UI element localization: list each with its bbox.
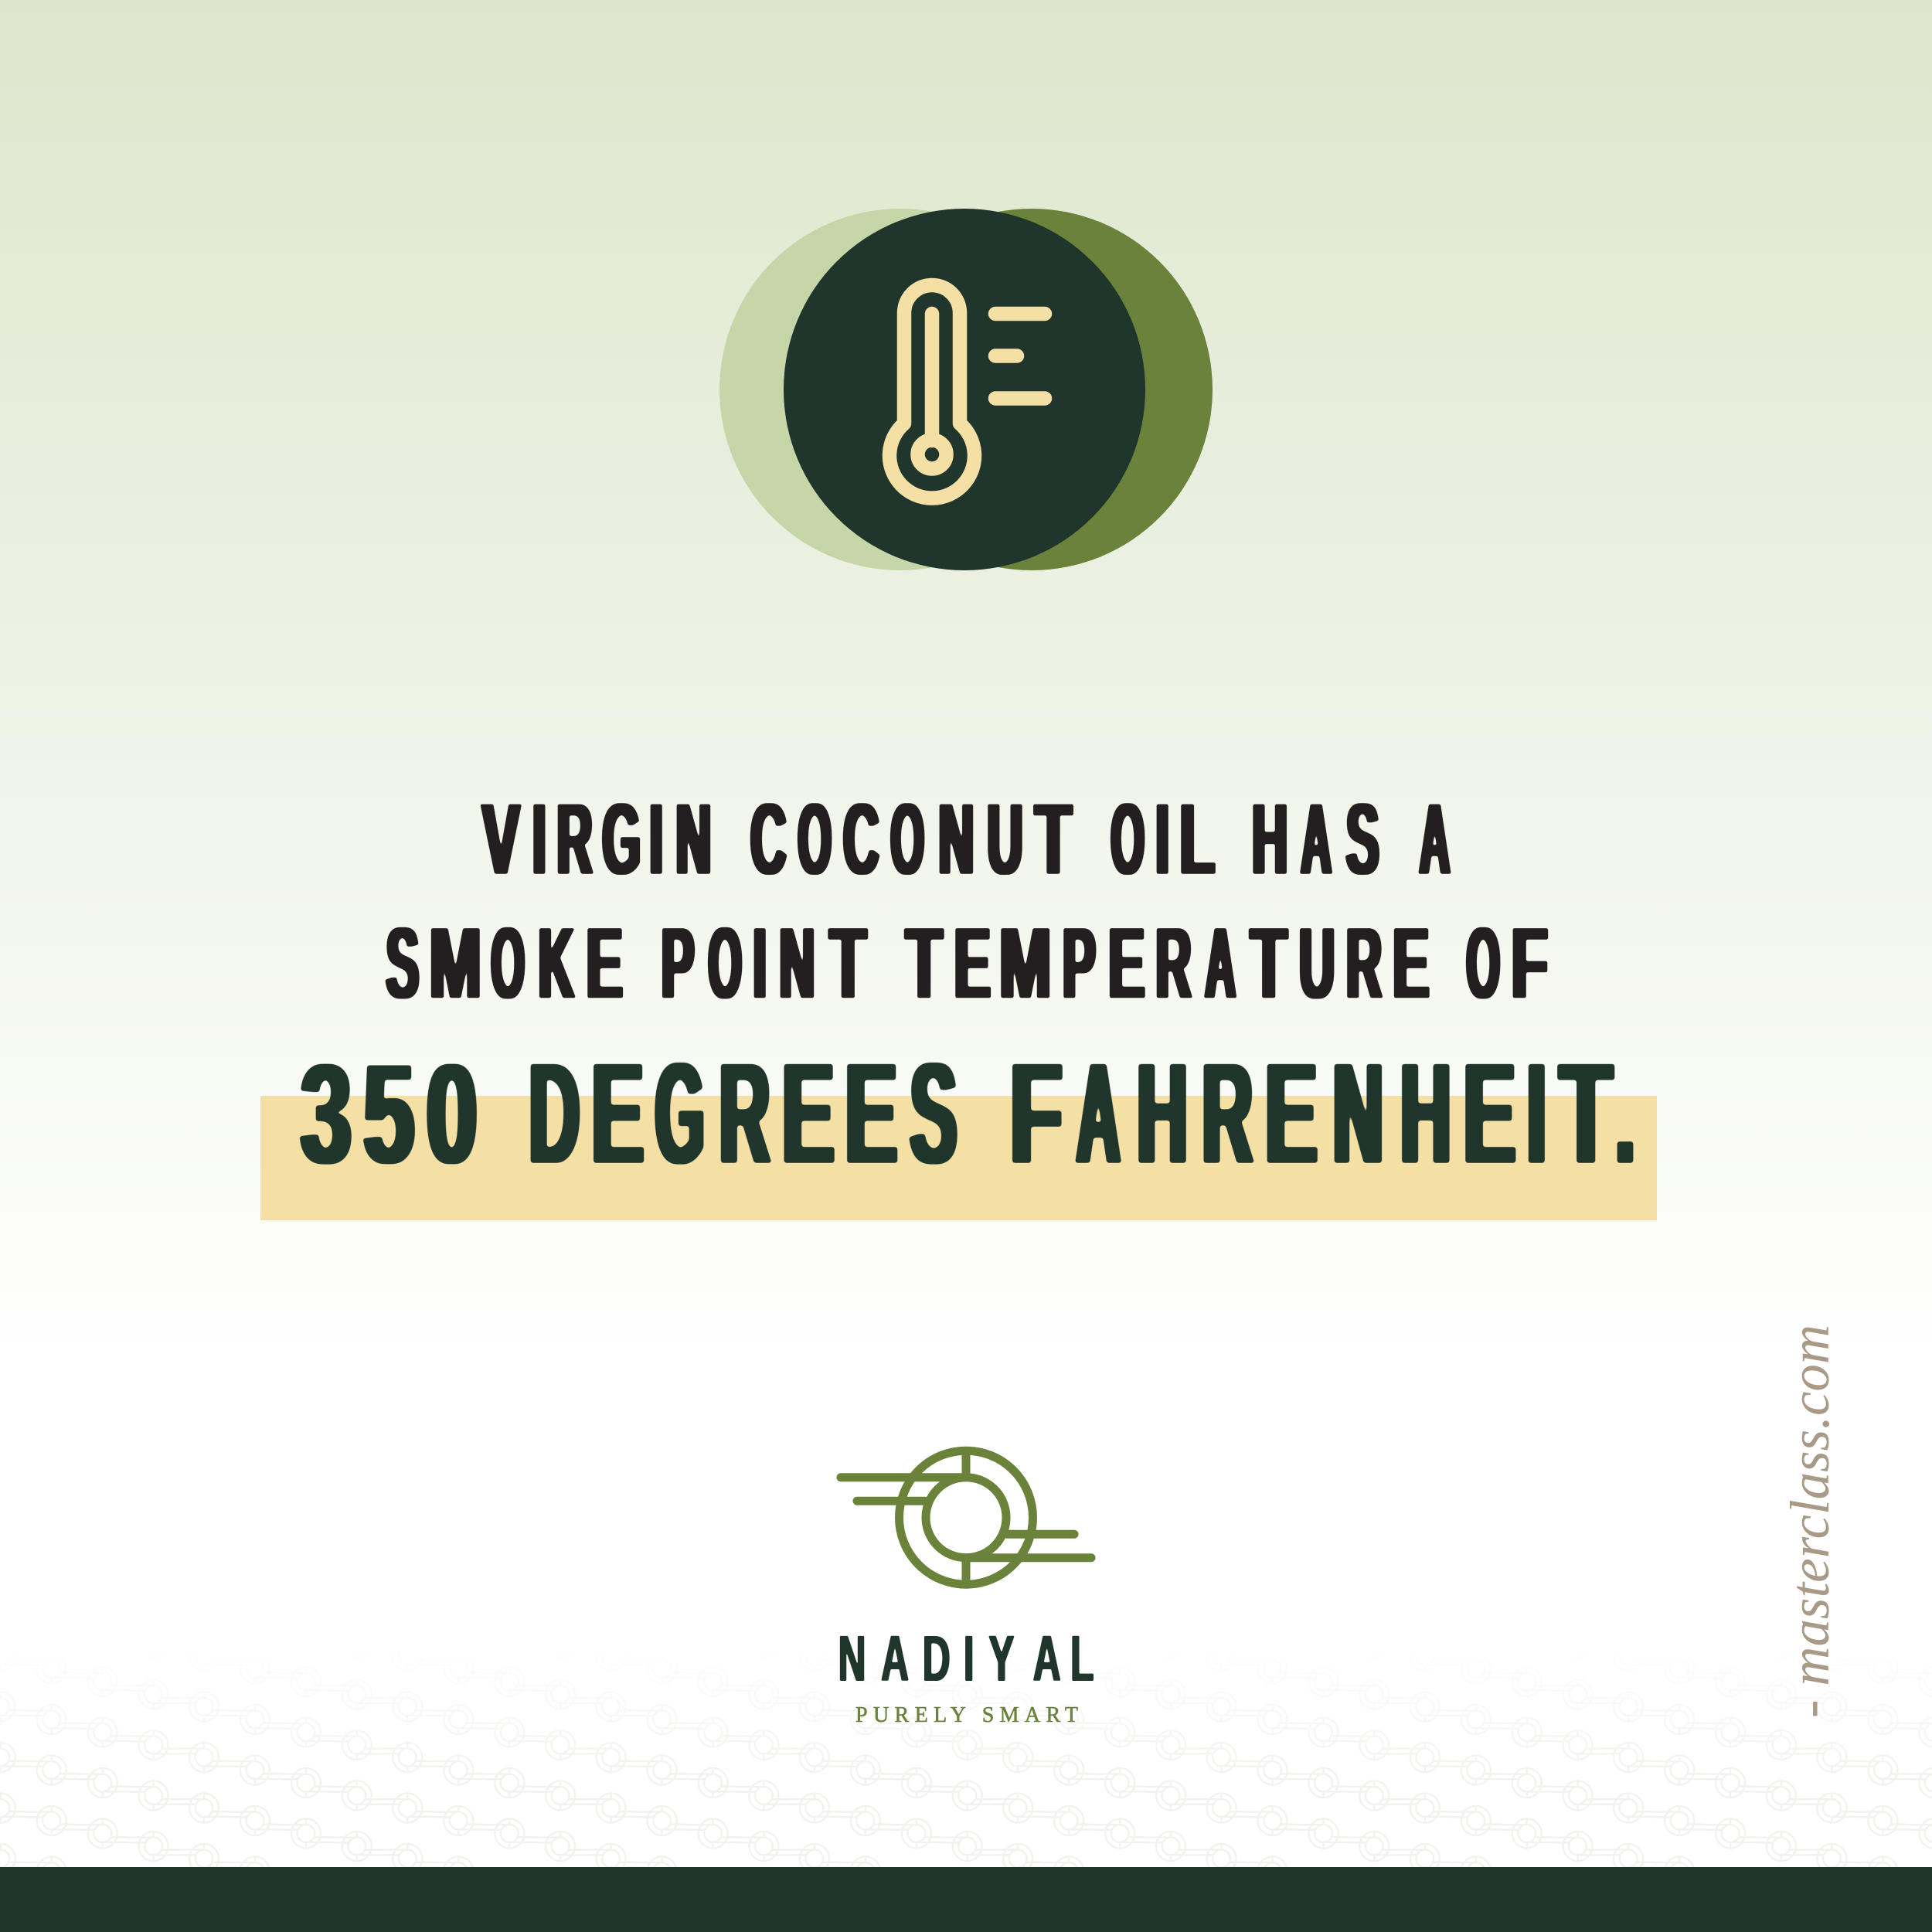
highlighted headline: 350 (301, 1035, 478, 1193)
olive circle (851, 209, 1213, 570)
highlighted headline: DEGREE S F AHRE NHEIT. (529, 1033, 1635, 1194)
bottom band (0, 1867, 1932, 1932)
icon: thermometer (889, 285, 1045, 498)
brand logo mark (841, 1451, 1091, 1584)
headline line 1: V IRGIN COCONUT OIL H AS A (482, 783, 1450, 896)
brand name: NADIYAL (838, 1621, 1094, 1695)
light green circle (719, 209, 1081, 570)
brand tagline: PURELY SMART (855, 1703, 1078, 1727)
background logo pattern (0, 1706, 1932, 1867)
headline line 2: SM OKE P OIN T T EM P E R AT URE OF (386, 906, 1548, 1019)
highlight bar (260, 1096, 1657, 1220)
dark circle (784, 209, 1145, 570)
background gradient (0, 0, 1932, 1360)
source credit: - masterclass.com (1779, 1325, 1841, 1718)
icon: thermometer badge (719, 209, 1213, 570)
